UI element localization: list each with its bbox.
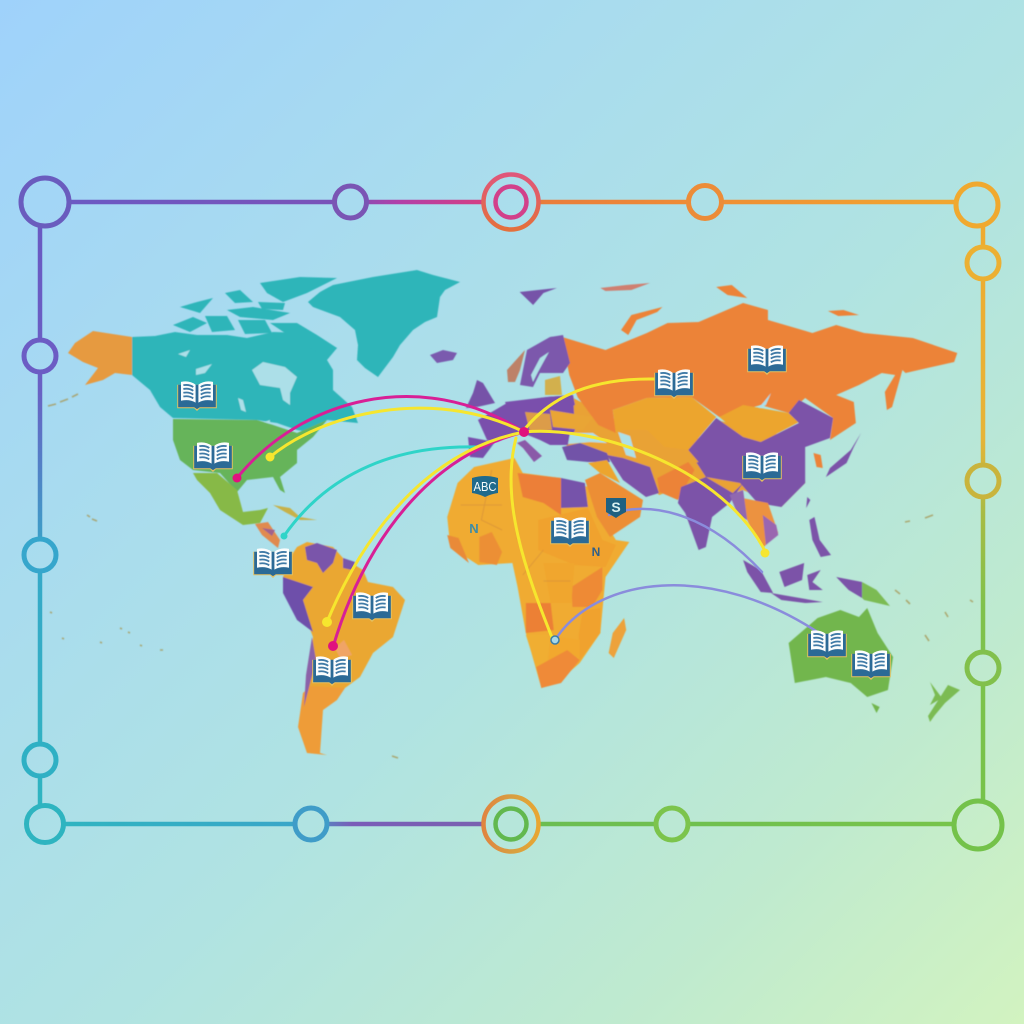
Turkey — [562, 443, 610, 462]
icon: book Canada — [177, 381, 217, 411]
Egypt — [561, 478, 588, 508]
node top right — [956, 184, 998, 226]
frame right rail — [981, 226, 985, 802]
arc: yellow to USA — [270, 408, 524, 457]
arc: yellow to southern Africa — [511, 438, 553, 640]
icon: book Eastern Australia — [851, 650, 891, 680]
arc: periwinkle Africa to Australia — [555, 585, 825, 640]
icon: book Argentina — [312, 656, 352, 686]
Arabia north — [588, 460, 620, 483]
Canada — [132, 277, 358, 433]
Spain — [468, 437, 495, 458]
Greenland — [308, 270, 460, 377]
Peru — [283, 577, 313, 632]
arc: yellow to Southeast Asia — [524, 431, 766, 553]
node left 2 — [24, 539, 56, 571]
India — [678, 477, 743, 550]
Asia and Oceania — [520, 283, 957, 713]
Guyana — [343, 558, 355, 570]
Chile strip — [304, 637, 316, 707]
Lake Baikal — [758, 393, 771, 409]
Baltic states — [545, 376, 562, 395]
icon: book Siberia — [747, 345, 787, 375]
node left 1 — [24, 340, 56, 372]
Alaska — [68, 331, 132, 385]
endpoint: Southeast Asia yellow — [760, 548, 770, 558]
Pakistan — [657, 462, 694, 500]
Ukraine — [550, 410, 593, 430]
Venezuela — [305, 543, 337, 573]
Romania — [550, 430, 568, 445]
Scandinavia — [520, 335, 570, 387]
endpoint: South America magenta — [328, 641, 338, 651]
hub dot — [519, 427, 529, 437]
Argentina and Chile — [298, 686, 345, 755]
Southeast Asia — [730, 490, 778, 547]
icon: book Brazil — [352, 592, 392, 622]
Indonesia and Philippines — [743, 517, 862, 603]
endpoint: USA yellow — [266, 452, 274, 462]
USA — [173, 419, 327, 493]
node bottom 2 — [295, 808, 327, 840]
Bolivia — [335, 640, 352, 658]
node top centre target — [484, 174, 538, 230]
arc: yellow to Russia — [524, 379, 654, 430]
Baltic sea gap — [531, 352, 549, 382]
Kazakhstan — [613, 397, 716, 450]
Saudi Arabia — [585, 473, 643, 537]
Africa continent — [447, 458, 629, 688]
arc: magenta to South America — [333, 432, 524, 647]
Madagascar — [609, 618, 626, 658]
node top 2 — [334, 186, 366, 218]
Africa borders — [461, 470, 570, 581]
France — [478, 405, 520, 442]
Italy — [517, 440, 542, 462]
South America — [283, 542, 405, 700]
endpoint: Central America cyan — [280, 532, 288, 540]
connected circle frame — [21, 174, 1002, 852]
Tasmania — [871, 703, 880, 713]
Central Europe — [505, 395, 575, 430]
China — [688, 400, 833, 507]
Central America — [255, 505, 317, 548]
arc: periwinkle Arabia to Southeast Asia — [609, 509, 762, 572]
Central Asia — [639, 430, 699, 470]
arc: cyan to Central America — [284, 447, 478, 536]
node bottom centre target — [484, 796, 538, 852]
Balkan mix — [525, 412, 552, 432]
endpoint: South America yellow — [322, 617, 332, 627]
node bottom left — [26, 806, 64, 842]
endpoint: USA magenta — [232, 474, 242, 482]
Papua green — [862, 582, 890, 606]
node bottom right — [954, 801, 1002, 849]
Africa country shades — [447, 508, 616, 688]
frame bottom rail — [65, 822, 953, 826]
node bottom 4 — [656, 808, 688, 840]
frame left rail — [38, 226, 42, 805]
icon: ABC badge: ABC — [474, 479, 496, 494]
Arctic islands — [520, 283, 859, 335]
Hudson Bay and lakes — [178, 350, 297, 442]
Eurasia base fill — [566, 395, 805, 507]
Australia — [789, 608, 893, 697]
icon: book China — [742, 452, 782, 482]
node right 2 — [967, 465, 999, 497]
Taiwan — [806, 497, 810, 508]
arc: magenta to USA — [237, 397, 524, 478]
Black Sea — [568, 433, 607, 444]
scattered islands specks — [48, 394, 973, 758]
icon: book Sudan — [550, 517, 590, 547]
icon: book Western Australia — [807, 630, 847, 660]
icon: book Colombia — [253, 548, 293, 578]
icon: S badge — [606, 498, 626, 518]
world map — [48, 270, 973, 758]
Norway — [507, 350, 525, 382]
Japan and Korea — [813, 433, 861, 477]
UK — [466, 380, 495, 408]
Caspian Sea — [618, 432, 636, 458]
icon: S badge: S — [611, 499, 621, 515]
Europe base fill — [478, 395, 575, 445]
Africa outline — [447, 458, 629, 688]
icon: letter N west Africa: N — [469, 521, 479, 536]
frame top rail — [68, 200, 956, 204]
connection arcs — [232, 379, 825, 651]
endpoint: southern Africa — [551, 636, 559, 644]
Iran — [607, 455, 659, 497]
arc: yellow to South America — [327, 432, 524, 622]
icon: ABC badge — [472, 476, 498, 497]
Mongolia — [719, 405, 799, 442]
node right 1 — [967, 247, 999, 279]
icon: book USA — [193, 442, 233, 472]
node right 3 — [967, 652, 999, 684]
icon: letter N east Africa: N — [592, 545, 600, 559]
open book icons — [177, 345, 891, 686]
Iceland — [430, 350, 457, 363]
node top left — [21, 178, 69, 226]
Mexico — [193, 473, 268, 525]
node left 3 — [24, 744, 56, 776]
node top 4 — [688, 186, 722, 218]
Libya — [518, 473, 561, 515]
New Zealand — [928, 682, 960, 722]
Russia — [562, 303, 957, 440]
icon: book Central Russia — [654, 369, 694, 399]
